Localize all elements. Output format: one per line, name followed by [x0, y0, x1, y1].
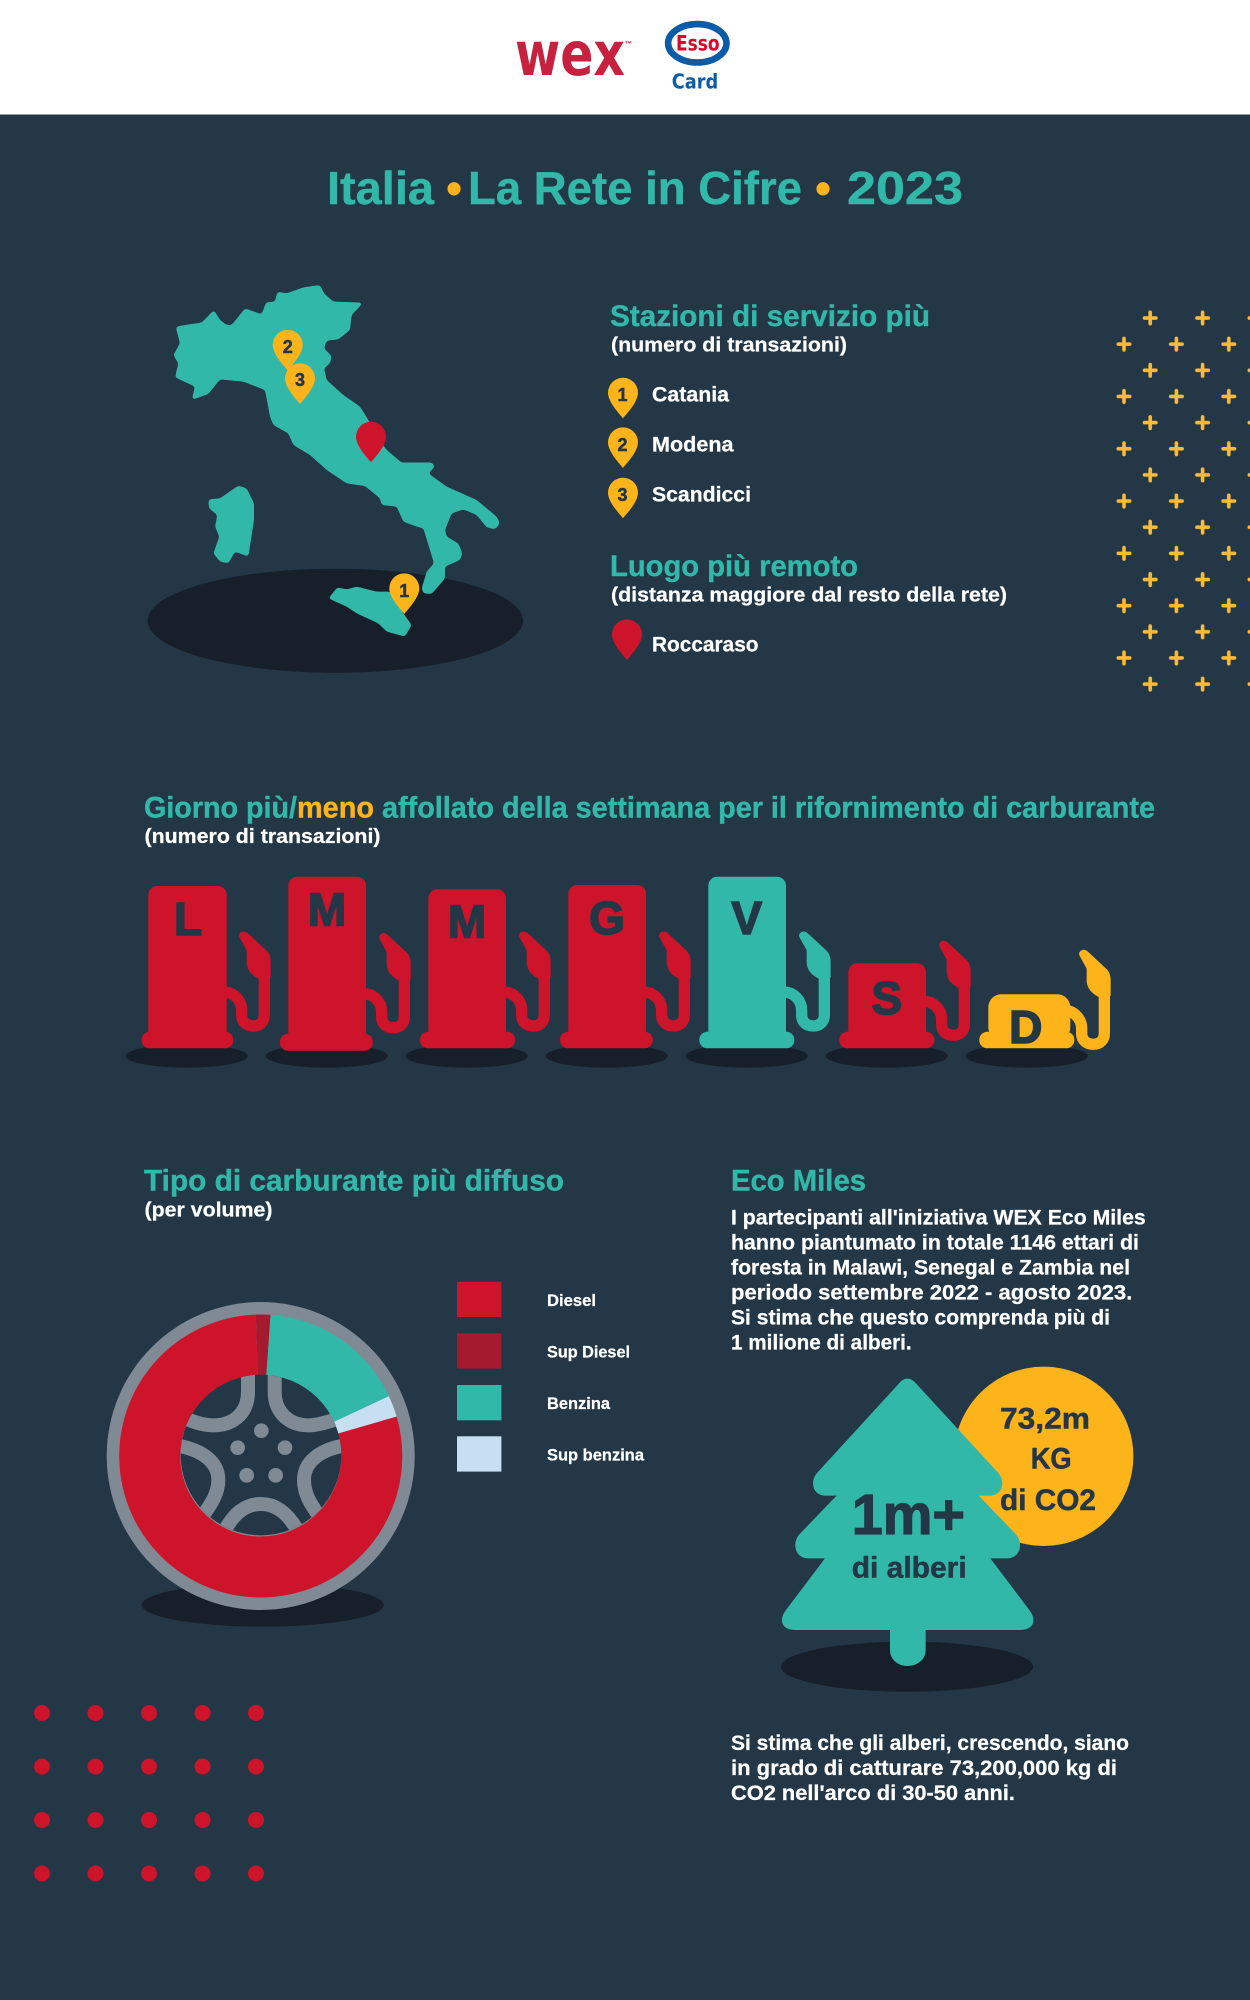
badge: CO2: di CO2 [1000, 1484, 1096, 1517]
pin 2 on map [273, 330, 303, 370]
heading: busiest day: meno [297, 792, 374, 824]
paragraph: Eco Miles: periodo settembre 2022 - agosto 2023. [731, 1280, 1132, 1304]
header: logos [0, 0, 1250, 114]
badge: CO2: KG [1031, 1442, 1072, 1475]
segment: Benzina [266, 1315, 389, 1422]
subheading: stations: (numero di transazioni) [611, 334, 847, 356]
map shadow [148, 569, 523, 673]
segment: Sup benzina [334, 1396, 397, 1434]
badge: CO2: 73,2m [1000, 1402, 1090, 1435]
subheading: remote: (distanza maggiore dal resto della rete) [611, 584, 1007, 606]
pump: Lunedì: L [174, 893, 202, 945]
list item: Catania: 1 [617, 385, 628, 405]
list item: Scandicci [608, 478, 751, 518]
list item: Scandicci: Scandicci [652, 483, 751, 507]
title: La Rete in Cifre [468, 162, 802, 214]
pin 1 on map: 1 [399, 581, 409, 601]
pump: Domenica (quietest): D [1009, 1001, 1042, 1053]
title: 2023 [847, 162, 963, 214]
decorative red dots [34, 1705, 264, 1882]
pump: Giovedì [546, 885, 689, 1068]
list item: Modena [608, 427, 735, 468]
legend item: Sup Diesel: Sup Diesel [547, 1344, 630, 1362]
title: • [446, 162, 462, 214]
paragraph: CO2 capture [731, 1731, 1129, 1805]
pin 3 on map: 3 [295, 370, 305, 390]
chart: fuel pumps by weekday [126, 877, 1109, 1068]
donut shadow [142, 1583, 384, 1627]
logo: Esso Card: Card [672, 70, 718, 94]
heading: busiest day: affollato della settimana per il rifornimento di carburante [382, 792, 1155, 824]
tree label: 1m+: 1m+ [852, 1483, 965, 1547]
chart: fuel share tyre donut [107, 1302, 415, 1627]
pin 2 on map: 2 [283, 337, 293, 357]
pump: Sabato: S [871, 972, 902, 1024]
pump: Mercoledì [406, 889, 549, 1068]
heading: stations: Stazioni di servizio più [610, 300, 930, 333]
segment: Sup Diesel [256, 1314, 271, 1376]
panel: top stations [608, 300, 930, 518]
logo: WEX: ™ [625, 41, 632, 48]
subheading: fuel type: (per volume) [144, 1198, 272, 1222]
paragraph: CO2 capture: CO2 nell'arco di 30-50 anni. [731, 1781, 1015, 1805]
tree shadow [781, 1642, 1033, 1692]
paragraph: CO2 capture: in grado di catturare 73,200,000 kg di [731, 1756, 1117, 1780]
pump: Martedì: M [308, 884, 346, 936]
list item: Modena: Modena [652, 433, 735, 457]
pump: Martedì [266, 877, 409, 1068]
panel: most remote place [610, 550, 1007, 660]
logo: Esso Card [668, 24, 726, 94]
paragraph: Eco Miles: 1 milione di alberi. [731, 1330, 912, 1354]
list item: Catania [608, 378, 730, 418]
badge: CO2 [954, 1367, 1133, 1546]
paragraph: Eco Miles: Si stima che questo comprenda più di [731, 1305, 1110, 1329]
paragraph: Eco Miles [731, 1205, 1146, 1354]
tree [782, 1379, 1033, 1666]
wheel hub [178, 1370, 343, 1535]
paragraph: Eco Miles: foresta in Malawi, Senegal e Zambia nel [731, 1255, 1130, 1279]
heading: busiest day: Giorno più/ [144, 792, 297, 824]
heading: fuel type: Tipo di carburante più diffuso [144, 1164, 564, 1198]
logo: WEX: wex [515, 19, 625, 90]
pump: Mercoledì: M [448, 896, 486, 948]
decorative plus pattern [1111, 305, 1250, 692]
pin 3 on map [285, 363, 315, 404]
legend: fuel types [457, 1282, 645, 1472]
tyre ring [107, 1302, 415, 1610]
heading: Eco Miles: Eco Miles [731, 1165, 866, 1198]
pump: Lunedì [126, 886, 269, 1068]
graphic: tree with CO2 badge [781, 1367, 1133, 1692]
logo: Esso Card: Esso [676, 32, 720, 56]
legend item: Sup benzina: Sup benzina [547, 1446, 645, 1464]
pin 1 on map [389, 573, 419, 614]
legend item: Benzina: Benzina [547, 1395, 611, 1413]
legend item: Sup Diesel [457, 1333, 630, 1369]
map: Italy regions [173, 285, 500, 637]
pump: Venerdì (busiest) [686, 877, 829, 1068]
pump: Venerdì (busiest): V [731, 892, 762, 944]
pump: Domenica (quietest) [966, 951, 1109, 1068]
list item: Roccaraso: Roccaraso [652, 633, 758, 657]
pump: Sabato [826, 942, 969, 1068]
title: • [815, 162, 831, 214]
map of Italy with shadow and pins [148, 285, 523, 673]
legend item: Diesel: Diesel [547, 1292, 596, 1310]
pin: remotest place on map [356, 422, 386, 462]
title [327, 162, 963, 214]
legend item: Sup benzina [457, 1436, 645, 1472]
list item: Scandicci: 3 [617, 485, 628, 505]
paragraph: Eco Miles: hanno piantumato in totale 1146 ettari di [731, 1230, 1139, 1254]
panel: Eco Miles text [731, 1165, 1146, 1354]
legend item: Diesel [457, 1282, 596, 1317]
segment: Diesel [119, 1315, 402, 1598]
paragraph: Eco Miles: I partecipanti all'iniziativa WEX Eco Miles [731, 1205, 1146, 1229]
title: Italia [327, 162, 434, 214]
list item: Modena: 2 [617, 435, 628, 455]
heading: remote: Luogo più remoto [610, 550, 858, 583]
paragraph: CO2 capture: Si stima che gli alberi, crescendo, siano [731, 1731, 1129, 1755]
legend item: Benzina [457, 1385, 611, 1420]
pump: Giovedì: G [589, 892, 625, 944]
list item: Catania: Catania [652, 383, 730, 407]
subheading: busiest day: (numero di transazioni) [144, 825, 380, 848]
list item: Roccaraso [612, 619, 758, 660]
tree label: di alberi: di alberi [852, 1551, 967, 1584]
